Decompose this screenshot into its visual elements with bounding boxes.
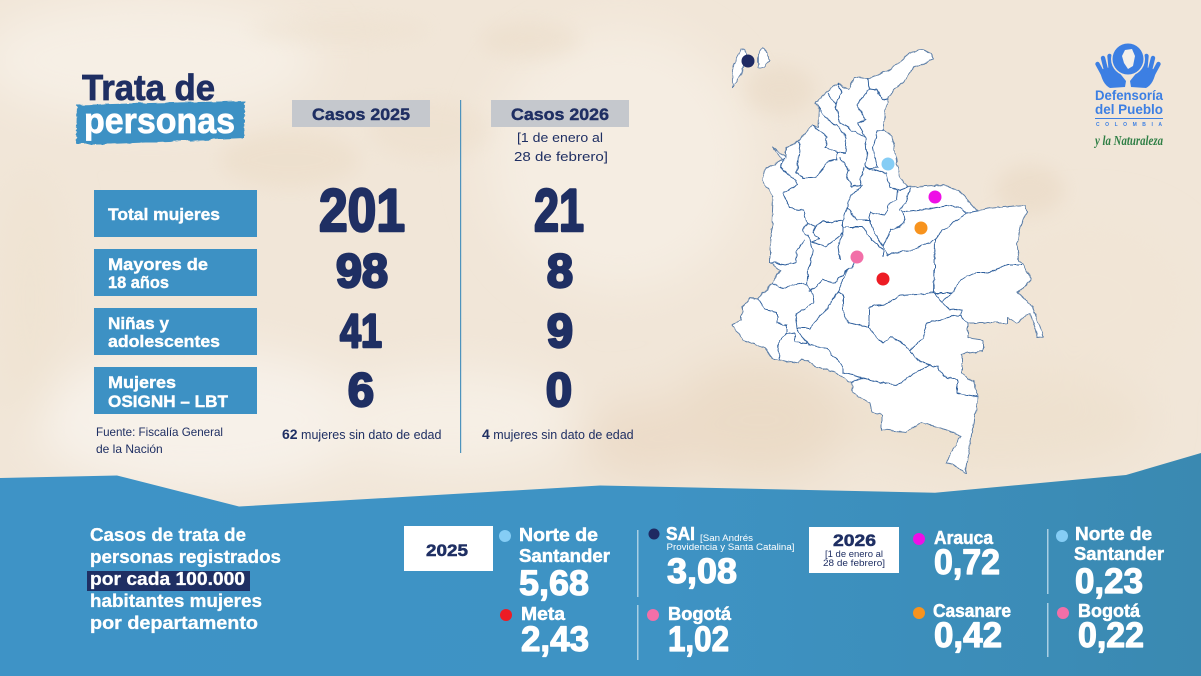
2025 Norte de Santander: 5,68 [519,564,589,603]
2025 Bogota: 1,02 [668,620,729,659]
dividers 2025 [637,530,638,660]
source note: Fuente: Fiscalía General [96,425,223,439]
title: Trata de [82,67,215,108]
2025 Norte de Santander [499,525,610,603]
2026 Bogota: 0,22 [1078,616,1144,655]
rate description text: personas registrados [90,546,281,567]
map shapes [732,47,1043,473]
rate description text: por departamento [90,612,258,633]
2025 Meta [500,604,589,659]
2026 Arauca: 0,72 [934,543,1000,582]
row: total mujeres: Total mujeres [108,205,220,224]
row: total mujeres [94,177,584,244]
2026 Bogota: Bogotá [1078,601,1141,621]
rate description text: habitantes mujeres [90,590,262,611]
2025 SAI: 3,08 [667,552,737,591]
title: personas [84,100,235,141]
row: ninas y adolescentes [94,304,573,357]
map markers [742,54,942,286]
column header: Casos 2026 [491,100,629,164]
note 2025 missing age: 62 mujeres sin dato de edad [282,426,441,442]
note 2026 missing age: 4 mujeres sin dato de edad [482,426,634,442]
2026 Norte de Santander: 0,23 [1075,562,1143,601]
2026 Arauca: Arauca [934,528,994,548]
2026 Arauca [913,528,1000,582]
row: mujeres OSIGNH LBT: Mujeres [108,373,176,392]
2026 Norte de Santander [1056,524,1164,601]
2026 Casanare: 0,42 [934,616,1002,655]
row: ninas y adolescentes: 41 [340,304,382,357]
2025 Meta: 2,43 [521,620,589,659]
map of Colombia [732,47,1043,473]
2026 Bogota [1057,601,1144,655]
row: mujeres OSIGNH LBT: OSIGNH – LBT [108,392,229,411]
column header: Casos 2025 [292,100,430,127]
row: total mujeres: 201 [319,177,405,244]
row: mujeres OSIGNH LBT: 6 [348,363,374,416]
row: mujeres OSIGNH LBT [94,363,572,416]
row: total mujeres: 21 [534,177,584,244]
dividers 2026 [1047,529,1048,657]
row: mayores de 18: 98 [336,244,388,297]
rate description text [87,524,281,633]
2025 Bogota [647,604,732,659]
row: mayores de 18: 8 [547,244,573,297]
column header: Casos 2026: [1 de enero al [517,130,603,145]
title [76,67,245,144]
divider between years [460,100,461,453]
rate description text: por cada 100.000 [90,568,245,589]
column header: Casos 2026: 28 de febrero] [514,149,608,164]
logo: Defensoria del Pueblo: Defensoría [1095,87,1163,103]
2025 SAI: Providencia y Santa Catalina] [666,542,794,552]
row: mayores de 18 [94,244,573,297]
logo: Defensoria del Pueblo: del Pueblo [1095,101,1163,117]
2026 Casanare: Casanare [933,601,1011,621]
2025 Norte de Santander: Norte de [519,525,598,545]
2026 label box: [1 de enero al [825,549,883,559]
2025 SAI: SAI [666,524,695,544]
2025 SAI: [San Andrés [700,533,754,543]
row: mujeres OSIGNH LBT: 0 [546,363,572,416]
2026 Norte de Santander: Norte de [1075,524,1152,544]
row: mayores de 18: 18 años [108,273,169,292]
2025 Bogota: Bogotá [668,604,732,624]
rate description text: Casos de trata de [90,524,246,545]
logo: Defensoria del Pueblo [1093,42,1163,149]
brush stroke behind personas [76,101,245,144]
2026 Casanare [913,601,1011,655]
2025 label box [404,526,493,571]
row: ninas y adolescentes: adolescentes [108,332,220,351]
2026 Norte de Santander: Santander [1074,544,1164,564]
column header: Casos 2025: Casos 2025 [312,106,410,124]
row: ninas y adolescentes: Niñas y [108,314,170,333]
row: mayores de 18: Mayores de [108,255,208,274]
bottom blue band [0,453,1201,676]
logo: Defensoria del Pueblo: COLOMBIA [1096,122,1162,128]
source note [96,425,223,456]
2025 Meta: Meta [521,604,566,624]
2025 Norte de Santander: Santander [519,546,610,566]
2025 label box: 2025 [426,541,468,560]
2026 label box: 28 de febrero] [823,558,885,568]
row: ninas y adolescentes: 9 [547,304,573,357]
2026 label box [809,527,899,573]
logo: Defensoria del Pueblo: y la Naturaleza [1093,134,1163,149]
2025 SAI [648,524,794,591]
source note: de la Nación [96,442,163,456]
2026 label box: 2026 [833,531,876,550]
column header: Casos 2026: Casos 2026 [511,106,609,124]
